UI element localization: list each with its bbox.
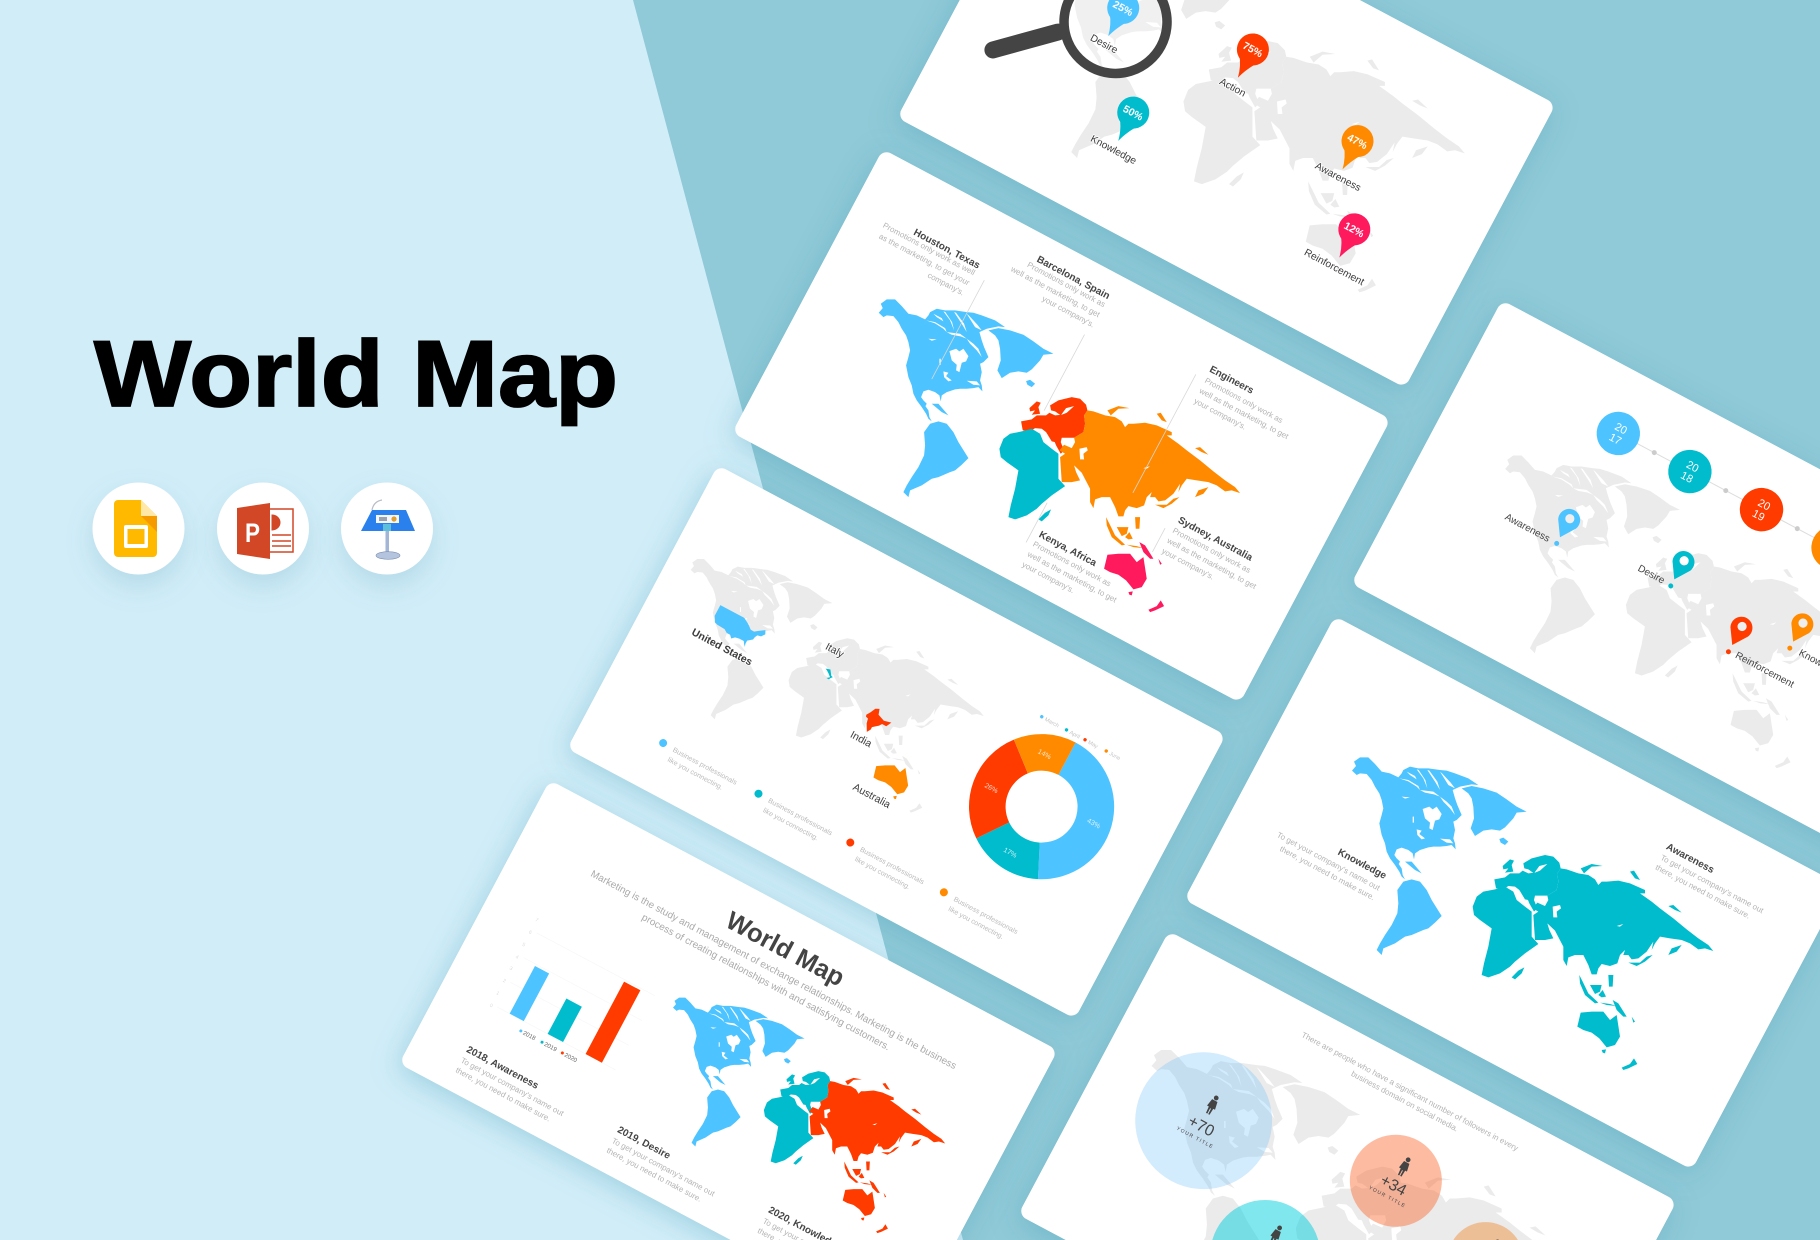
timeline [1589, 404, 1820, 577]
callout: Engineers [1191, 364, 1302, 452]
timeline: 20 [1612, 421, 1629, 437]
bar chart: 1 [495, 990, 500, 997]
callout: Houston, Texas: company's. [926, 271, 966, 297]
legend: business professionals: Business professionals [952, 896, 1019, 936]
callout: Sydney, Australia: Sydney, Australia [1176, 515, 1255, 564]
text: 2020 Knowledge [756, 1205, 874, 1240]
two colour world map [1270, 685, 1775, 1116]
callout: Kenya, Africa [1020, 529, 1130, 615]
timeline: 17 [1607, 431, 1623, 448]
legend: business professionals: Business professionals [859, 846, 925, 886]
slide: followers bubbles [1018, 931, 1677, 1240]
pin: Desire: Desire [1636, 563, 1667, 587]
intro text: There are people who have a significant number of followers in every [1300, 1030, 1520, 1153]
callout: Barcelona, Spain: Promotions only work as [1026, 260, 1107, 309]
pin: 25% Desire: Desire [1088, 33, 1120, 56]
text: Awareness: there, you need to make sure. [1654, 863, 1752, 921]
timeline: 20 [1684, 459, 1700, 475]
callout: Houston, Texas: as the marketing, to get your [877, 232, 971, 287]
timeline: 19 [1750, 508, 1766, 524]
text: Knowledge [1270, 818, 1389, 902]
donut legend: April [1068, 730, 1081, 740]
callout: Houston, Texas: Houston, Texas [911, 227, 982, 272]
legend: business professionals [652, 738, 1020, 946]
text: 2018 Awareness: To get your company's name out [459, 1056, 566, 1118]
icon: Keynote [341, 482, 433, 574]
callout: Sydney, Australia: Promotions only work as [1171, 526, 1252, 575]
slide: timeline and location pins [1351, 300, 1820, 854]
bubble: orange [1434, 1209, 1537, 1240]
pin: Awareness: Awareness [1503, 512, 1552, 545]
text: 2018 Awareness: 2018, Awareness [464, 1044, 541, 1092]
slide: two colour world map [1184, 616, 1820, 1170]
callout: Houston, Texas [870, 213, 982, 298]
pin: 47% Awareness [1313, 115, 1387, 194]
bar chart: 5 [521, 942, 526, 949]
legend: business professionals: like you connecting. [762, 807, 819, 842]
bubble: +70 [1111, 1028, 1296, 1213]
bubble: +34: +34 [1377, 1172, 1409, 1200]
text: Awareness: To get your company's name out [1659, 853, 1766, 916]
text: Knowledge: there, you need to make sure. [1278, 844, 1376, 902]
legend: business professionals: like you connecting. [666, 757, 724, 792]
text: Awareness: Awareness [1664, 842, 1716, 876]
callout: Barcelona, Spain: Barcelona, Spain [1035, 254, 1112, 302]
bubble: +70: +70 [1185, 1113, 1217, 1141]
text: Awareness [1654, 842, 1772, 925]
grey world map [947, 0, 1537, 346]
timeline: 18 [1678, 470, 1695, 486]
pin: 75% Action [1216, 28, 1275, 100]
label: Italy: Italy [823, 641, 847, 661]
callout: Sydney, Australia: your company's. [1160, 546, 1216, 582]
donut legend: March [1043, 717, 1060, 729]
callout: Kenya, Africa: Kenya, Africa [1037, 529, 1099, 569]
slide intro text: process of creating relationships with and satisfying customers. [640, 912, 892, 1053]
text: Knowledge: Knowledge [1336, 847, 1388, 882]
callout: Kenya, Africa: Promotions only work as [1031, 540, 1113, 588]
text: 2019 Desire: there, you need to make sure. [605, 1146, 703, 1204]
bar chart: 2018 [522, 1031, 537, 1042]
bar chart: 0 [488, 1003, 494, 1009]
icon: PowerPoint [217, 482, 309, 574]
pin: 47% Awareness: Awareness [1313, 161, 1362, 194]
text: 2018 Awareness: there, you need to make sure. [454, 1066, 552, 1123]
slide heading: World Map [721, 907, 849, 992]
callout: Kenya, Africa: well as the marketing, to get [1025, 549, 1119, 605]
bar chart: 2 [502, 978, 507, 985]
text: 2018 Awareness [454, 1044, 572, 1128]
grey world map [1054, 963, 1657, 1240]
callout: Barcelona, Spain: well as the marketing, to get [1008, 264, 1102, 320]
legend: business professionals: Business professionals [671, 747, 738, 787]
donut chart: 17% [1002, 847, 1018, 860]
pin: 25% Desire [1087, 0, 1145, 57]
donut chart: 14% [1036, 748, 1052, 761]
donut chart: 26% [983, 782, 999, 795]
pin: Reinforcement: Reinforcement [1733, 650, 1796, 691]
icon: Google Slides [92, 482, 184, 574]
slide: countries and donut [567, 465, 1226, 1019]
coloured world map [797, 227, 1302, 658]
donut chart [943, 708, 1140, 905]
bar chart: 2020 [563, 1053, 578, 1065]
pin: 47% Awareness: 47% [1345, 132, 1370, 152]
pin: 12% Reinforcement [1302, 200, 1391, 288]
callout: Barcelona, Spain: your company's. [1041, 294, 1096, 329]
bubble: teal [1191, 1181, 1340, 1240]
callout: Sydney, Australia [1159, 515, 1270, 601]
slide: pins map [897, 0, 1561, 388]
title: World Map [94, 321, 618, 426]
callout: Kenya, Africa: your company's. [1021, 560, 1076, 595]
donut legend: May [1087, 740, 1099, 750]
label: India: India [848, 729, 874, 750]
callout: Barcelona, Spain [1003, 245, 1112, 330]
bar chart: 7 [534, 917, 539, 924]
donut legend: June [1108, 751, 1121, 762]
bubble: +34 [1334, 1119, 1458, 1240]
pin: 75% Action: 75% [1240, 40, 1265, 61]
callout: Engineers: well as the marketing, to get [1197, 386, 1291, 441]
pin: 12% Reinforcement: Reinforcement [1302, 247, 1366, 288]
text: 2019 Desire [605, 1125, 723, 1208]
coloured world map [611, 943, 992, 1240]
pin: Desire [1636, 535, 1698, 596]
pin: 50% Knowledge [1088, 87, 1163, 167]
label: Australia: Australia [851, 781, 893, 811]
pin: 50% Knowledge: Knowledge [1088, 134, 1138, 167]
bubble: +34: YOUR TITLE [1367, 1185, 1407, 1210]
slide intro text: Marketing is the study and management of exchange relationships. Marketing is the business [589, 869, 958, 1072]
callout: Engineers: your company's. [1192, 396, 1248, 432]
pin: Knowledge [1778, 609, 1820, 681]
bar chart [484, 917, 662, 1082]
text: 2019 Desire: 2019, Desire [615, 1125, 672, 1162]
text: Knowledge: To get your company's name out [1275, 830, 1382, 893]
icon: PowerPoint: P [245, 518, 260, 548]
pin: 12% Reinforcement: 12% [1342, 220, 1367, 241]
pin: Reinforcement [1717, 613, 1811, 691]
slide: continents with callouts [732, 149, 1391, 703]
icon: magnifier [993, 0, 1185, 119]
text: 2019 Desire: To get your company's name out [610, 1136, 717, 1199]
map with highlighted countries [624, 500, 1034, 850]
callout: Engineers: Engineers [1207, 364, 1256, 397]
donut chart: 43% [1086, 818, 1101, 830]
background: light blue wedge [0, 0, 963, 1240]
callout: Sydney, Australia: well as the marketing, to get [1165, 536, 1258, 591]
intro text: business domain on social media. [1350, 1069, 1460, 1133]
donut legend [1038, 714, 1121, 762]
bar chart: 6 [527, 929, 533, 936]
legend: business professionals: like you connecting. [947, 906, 1005, 941]
slide: title, bar chart and map [399, 780, 1058, 1240]
grey world map [1423, 383, 1820, 814]
label: United States: United States [689, 626, 754, 669]
callout: Engineers: Promotions only work as [1203, 376, 1284, 425]
bar chart: 3 [508, 966, 514, 972]
timeline: 20 [1756, 497, 1772, 513]
callout: Houston, Texas: Promotions only work as well [881, 221, 977, 277]
legend: business professionals: Business professionals [767, 798, 834, 838]
bar chart: 4 [514, 954, 520, 961]
pin: 75% Action: Action [1217, 77, 1247, 100]
bar chart: 2019 [543, 1042, 558, 1054]
legend: business professionals: like you connecting. [853, 856, 911, 891]
pin: 50% Knowledge: 50% [1121, 103, 1146, 124]
pin: Awareness [1503, 483, 1584, 554]
bubble: +70: YOUR TITLE [1175, 1126, 1215, 1150]
